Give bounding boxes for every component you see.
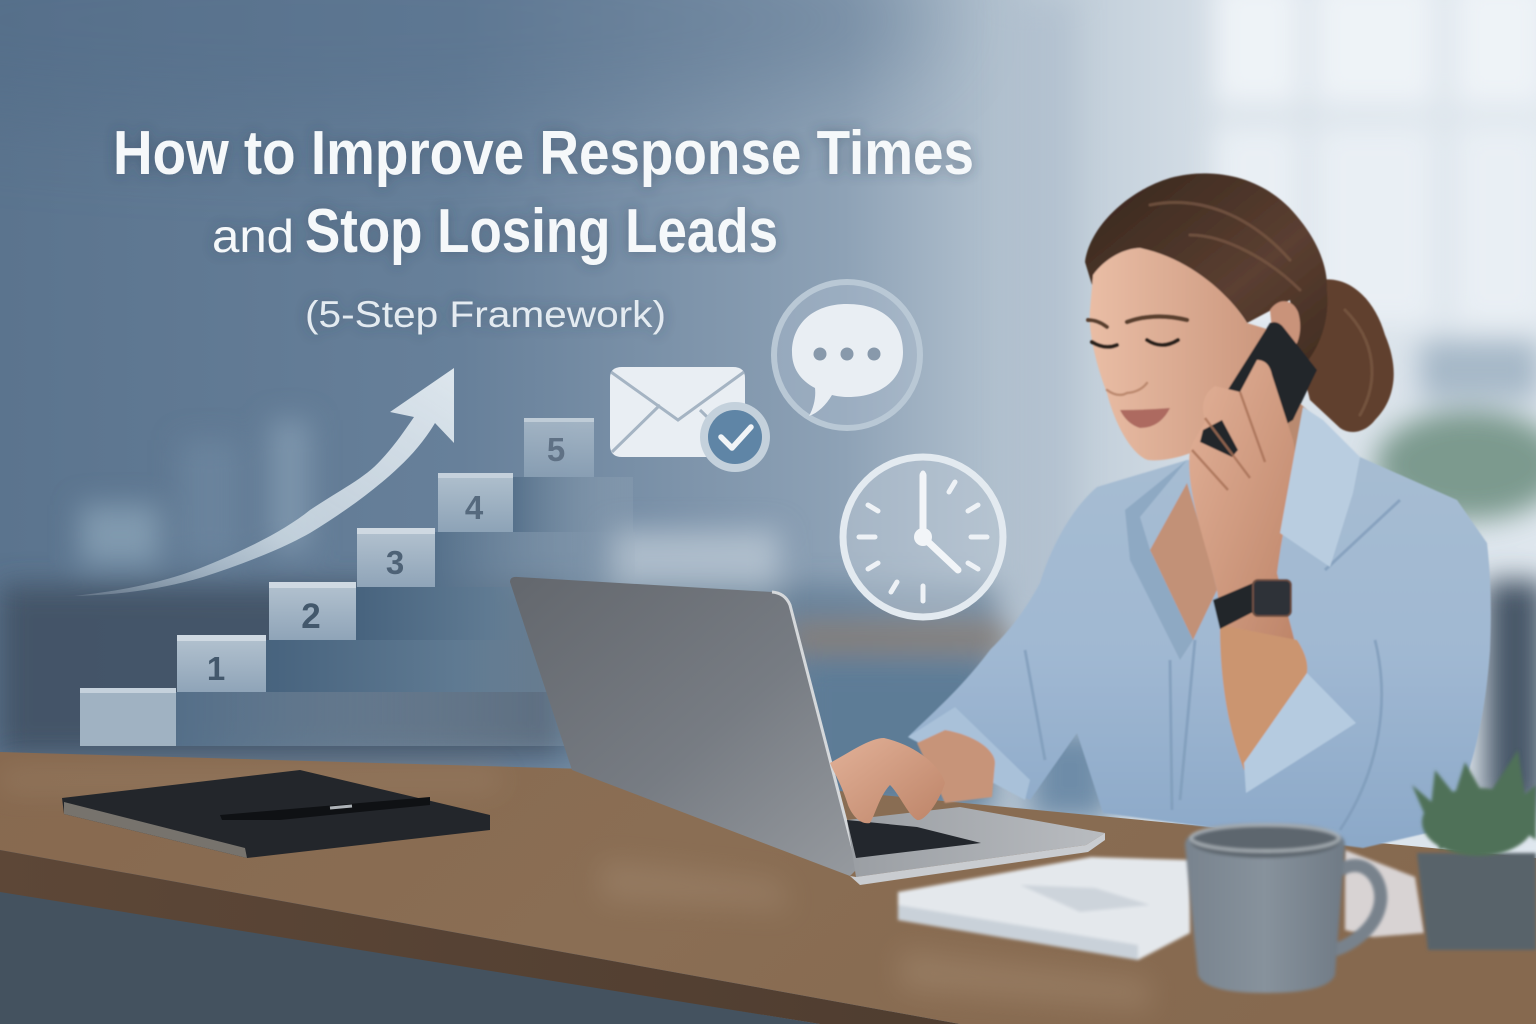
- finger creases: [1192, 392, 1265, 490]
- laptop: [510, 577, 1105, 885]
- left collar: [1125, 460, 1193, 660]
- torso shirt: [908, 457, 1491, 848]
- step 1: 1: [207, 650, 225, 687]
- pot: [1417, 853, 1536, 950]
- forearm: [1220, 625, 1307, 770]
- neck: [1210, 395, 1323, 540]
- title line 2: Stop Losing Leads: [305, 197, 778, 266]
- ponytail: [1295, 279, 1394, 432]
- step 2: 2: [301, 597, 321, 636]
- icon: envelope with check: [610, 367, 770, 472]
- left cuff: [908, 707, 1030, 800]
- papers: [898, 850, 1424, 960]
- leaves: [1412, 750, 1536, 856]
- step 2: [269, 582, 356, 640]
- title: [113, 119, 974, 335]
- step 5: 5: [547, 431, 565, 468]
- phone between fingers: [1200, 420, 1238, 457]
- risers: [176, 477, 635, 746]
- icon: chat bubble: [774, 282, 920, 428]
- keyboard: [847, 820, 981, 858]
- lips: [1120, 408, 1170, 428]
- left forearm: [917, 730, 995, 803]
- eyes brows nose mouth: [1088, 316, 1187, 395]
- step 3: [357, 528, 435, 587]
- hair: [1085, 173, 1328, 370]
- laptop base: [847, 807, 1105, 877]
- desk: [0, 752, 1536, 1024]
- step 4: [438, 473, 513, 532]
- ear: [1270, 301, 1300, 345]
- base step: [80, 688, 176, 746]
- face: [1090, 248, 1280, 460]
- potted plant: [1412, 750, 1536, 950]
- right cuff and sleeve: [1244, 673, 1356, 793]
- staircase 1 to 5: [80, 418, 635, 746]
- right collar: [1280, 407, 1360, 567]
- growth arrow: [74, 368, 454, 596]
- phone: [1200, 322, 1317, 457]
- woman: [908, 173, 1491, 848]
- hand and wrist: [1189, 360, 1297, 650]
- hand on keyboard: [830, 738, 945, 823]
- shirt folds: [1025, 500, 1400, 830]
- step 4: 4: [465, 489, 484, 526]
- watch: [1213, 580, 1291, 629]
- icon: clock: [843, 457, 1003, 617]
- title line 1: How to Improve Response Times: [113, 119, 974, 188]
- subtitle: (5-Step Framework): [305, 294, 666, 335]
- step 5: [524, 418, 594, 477]
- step 1: [177, 635, 266, 692]
- hair highlights: [1150, 202, 1372, 415]
- chest skin: [1150, 483, 1217, 640]
- title line 2: and: [212, 210, 294, 262]
- coffee mug: [1185, 823, 1381, 993]
- notebook and pen: [62, 770, 490, 858]
- step 3: 3: [386, 544, 404, 581]
- laptop lid: [510, 577, 858, 876]
